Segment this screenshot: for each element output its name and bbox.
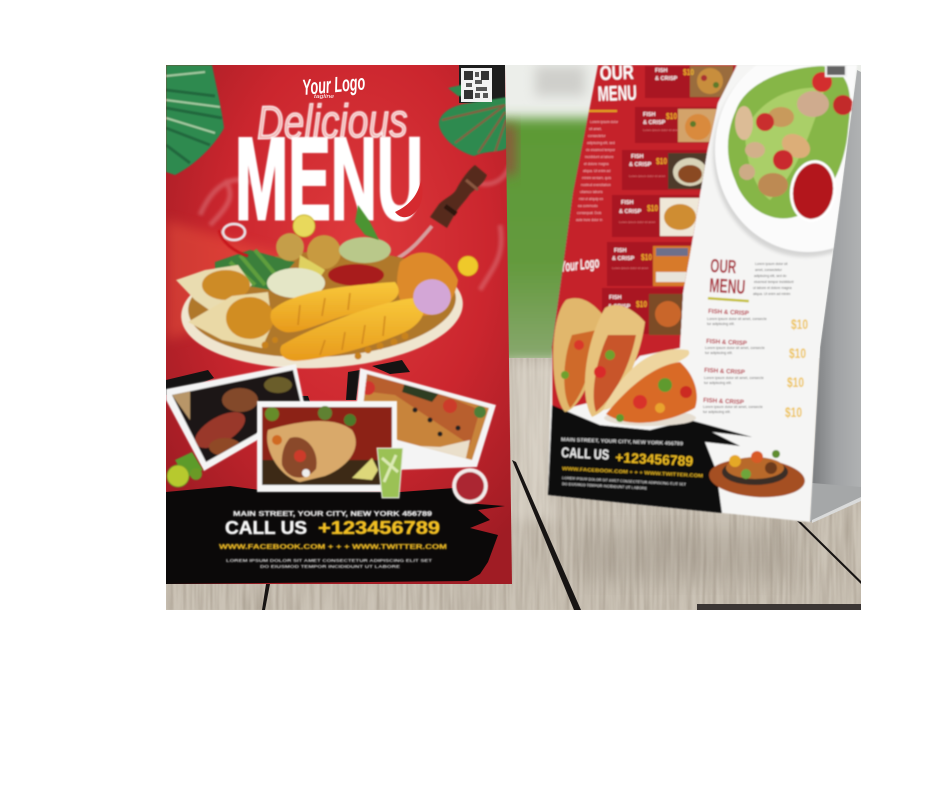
small print: LOREM IPSUM DOLOR SIT AMET CONSECTETUR ADIPISCING ELIT SET (226, 558, 432, 564)
column description: ea commodo (578, 204, 598, 208)
menu row 4: Lorem ipsum dolor sit amet (619, 220, 655, 224)
white menu items: tur adipiscing elit. (703, 410, 731, 414)
white menu description: aliqua. Ut enim ad minim (753, 292, 790, 296)
plate (180, 252, 464, 370)
menu row 2 (635, 107, 723, 143)
menu row 4: $10 (647, 204, 658, 213)
tacos (553, 298, 697, 426)
menu row 5: FISH (614, 248, 627, 254)
wood plank gaps (262, 460, 861, 610)
white menu items: tur adipiscing elit. (704, 381, 732, 385)
white menu items: tur adipiscing elit. (707, 322, 735, 326)
menu row 2: Lorem ipsum dolor sit amet (643, 128, 679, 132)
dark strip at table edge (697, 604, 861, 610)
white menu description (753, 262, 794, 296)
menu row 2: FISH (643, 112, 656, 118)
mojito glass (377, 448, 403, 498)
chickpeas (262, 332, 408, 360)
white menu items (703, 308, 808, 420)
white menu description: amet, consectetur (755, 268, 783, 272)
tent QR code (825, 65, 847, 77)
white menu description: eiusmod tempor incididunt (754, 280, 794, 284)
column description: incididunt ut labore (585, 155, 614, 159)
white menu heading: MENU (709, 275, 746, 299)
contact text: WWW.FACEBOOK.COM + + + WWW.TWITTER.COM (562, 466, 703, 479)
white menu items: $10 (791, 316, 808, 332)
white menu items: tur adipiscing elit. (705, 351, 733, 355)
menu row 1 (645, 66, 735, 98)
contact text: DO EIUSMOD TEMPOR INCIDIDUNT UT LABORE (562, 482, 648, 490)
column description: nisi ut aliquip ex (579, 197, 603, 201)
black contact band (548, 405, 752, 513)
white menu items: FISH & CRISP (703, 397, 744, 406)
white menu items: Lorem ipsum dolor sit amet, consecte (704, 376, 764, 380)
menu row 2: & CRISP (643, 120, 666, 126)
plate with fried fish (176, 233, 466, 375)
web links: WWW.FACEBOOK.COM + + + WWW.TWITTER.COM (219, 544, 447, 551)
corn-coated pieces (176, 265, 274, 348)
salad plate (712, 65, 854, 258)
menu row 4: & CRISP (619, 209, 642, 215)
column logo: Your Logo (559, 254, 600, 276)
QR code (461, 68, 492, 102)
menu row 2: $10 (666, 112, 677, 121)
shrimp (397, 252, 458, 316)
menu row 3: $10 (656, 157, 667, 166)
menu row 1: $10 (683, 68, 694, 77)
logo: Your Logo (301, 70, 366, 100)
phone number: +123456789 (318, 518, 440, 538)
white menu items: Lorem ipsum dolor sit amet, consecte (705, 346, 765, 350)
white menu items: FISH & CRISP (706, 338, 747, 347)
menu row 5 (607, 242, 693, 286)
ketchup bowl (788, 158, 836, 220)
white menu items: $10 (787, 374, 804, 390)
column description: et dolore magna (584, 162, 609, 166)
menu row 4: FISH (621, 200, 634, 206)
white menu items: FISH & CRISP (704, 367, 745, 376)
column description: consectetur (588, 134, 606, 138)
menu row 1: & CRISP (655, 76, 678, 82)
white menu items: Lorem ipsum dolor sit amet, consecte (703, 405, 763, 409)
white menu items: $10 (785, 404, 802, 420)
menu row 3: FISH (631, 154, 644, 160)
sizzling plate (708, 450, 806, 500)
noodle salad (339, 237, 391, 263)
fried fish upper (271, 282, 399, 332)
menu row 5: $10 (641, 253, 652, 262)
contact text: MAIN STREET, YOUR CITY, NEW YORK 456789 (561, 437, 683, 447)
logo: tagline (314, 94, 334, 100)
title: MENU: MENU (235, 113, 423, 244)
menu row 6: $10 (636, 300, 647, 309)
contact details (219, 511, 447, 564)
column heading: OUR (599, 62, 635, 85)
menu row 6 (602, 288, 690, 335)
cream dip (267, 268, 325, 298)
pizza photo (355, 368, 496, 470)
panel: tent card menu (547, 65, 858, 522)
contact text (561, 437, 703, 490)
menu row 6: & CRISP (608, 304, 631, 310)
smoke wisps (200, 165, 510, 290)
column description: aliqua. Ut enim ad (583, 169, 610, 173)
white menu heading: OUR (710, 256, 737, 278)
menu row 5: Lorem ipsum dolor sit amet (612, 266, 648, 270)
onion ring, lemons, herbs (219, 205, 478, 315)
white menu items: Lorem ipsum dolor sit amet, consecte (707, 317, 767, 321)
red menu column (551, 65, 738, 411)
column heading: MENU (597, 82, 637, 106)
black brush band (166, 486, 505, 584)
column description: sit amet, (589, 127, 602, 131)
white menu description: adipiscing elit, sed do (754, 274, 787, 278)
white menu items: FISH & CRISP (708, 308, 749, 317)
potatoes (276, 233, 341, 285)
infographic: menu mockup (166, 65, 861, 610)
white menu heading (709, 258, 746, 295)
column description: nostrud exercitation (581, 183, 611, 187)
title: Delicious: Delicious (256, 93, 408, 149)
grill photo (165, 364, 310, 471)
fried fish lower (280, 298, 424, 361)
column description: do eiusmod tempor (586, 148, 616, 152)
white menu items: $10 (789, 345, 806, 361)
contact text: LOREM IPSUM DOLOR SIT AMET CONSECTETUR ADIPISCING ELIT SET (562, 476, 687, 487)
greens (215, 250, 295, 290)
column description: minim veniam, quis (582, 176, 611, 180)
red sauce (328, 264, 384, 286)
menu row 6: FISH (609, 295, 622, 301)
right monstera leaf (439, 84, 507, 156)
panel: front poster (165, 65, 512, 584)
column description: Lorem ipsum dolor (590, 120, 619, 124)
menu row 3 (622, 150, 712, 190)
panel: tent card stand (810, 70, 861, 523)
column description: aute irure dolor in (576, 218, 603, 222)
logo (302, 76, 365, 99)
column description (576, 120, 619, 222)
pepper mill (430, 165, 487, 228)
call us: CALL US (225, 518, 307, 538)
limes (167, 452, 203, 487)
chili on letter U (395, 180, 423, 217)
burrito photo (257, 401, 397, 492)
black scratches behind photos (166, 360, 410, 402)
menu row 3: & CRISP (629, 162, 652, 168)
contact text: CALL US (561, 444, 610, 463)
menu row 4 (612, 195, 704, 237)
white menu description: ut labore et dolore magna (753, 286, 792, 290)
column description: consequat. Duis (577, 211, 602, 215)
menu row 5: & CRISP (612, 256, 635, 262)
left monstera leaf (166, 65, 224, 175)
small print line 2: DO EIUSMOD TEMPOR INCIDIDUNT UT LABORE (260, 564, 401, 570)
background: blurred garden and wooden table (166, 65, 861, 610)
menu row 3: Lorem ipsum dolor sit amet (629, 174, 665, 178)
white menu description: Lorem ipsum dolor sit (755, 262, 787, 266)
address: MAIN STREET, YOUR CITY, NEW YORK 456789 (233, 511, 432, 518)
column description: ullamco laboris (580, 190, 603, 194)
black corner behind QR (459, 65, 505, 103)
ketchup dish (452, 468, 488, 504)
contact text: +123456789 (615, 449, 694, 469)
column description: adipiscing elit, sed (587, 141, 615, 145)
column heading (597, 65, 638, 102)
menu row 1: FISH (655, 68, 668, 74)
